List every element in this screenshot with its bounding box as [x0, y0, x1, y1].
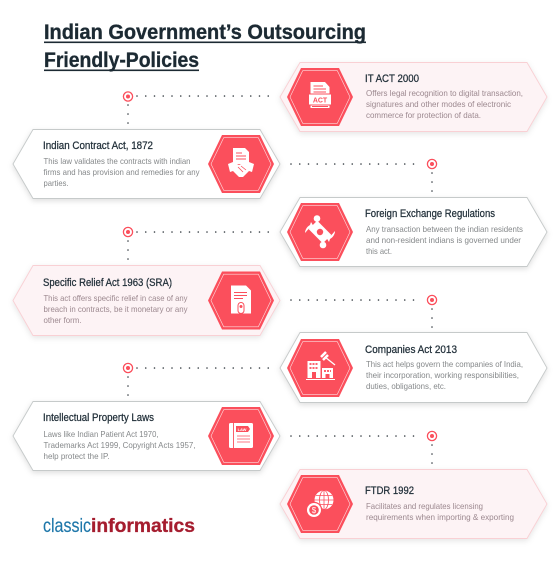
panel: Intellectual Property Laws: Trademarks Act 1999, Copyright Acts 1957, — [44, 441, 196, 450]
panel: Indian Contract Act, 1872: This law validates the contracts with indian — [44, 157, 191, 166]
connector: Contract Act to Foreign Exchange — [291, 159, 437, 192]
icon: contract handshake — [208, 135, 274, 193]
panel: Companies Act 2013: Companies Act 2013 — [365, 344, 457, 356]
panel: Specific Relief Act 1963 (SRA): This act offers specific relief in case of any — [44, 294, 188, 303]
panel: FTDR 1992: requirements when importing & exporting — [366, 513, 514, 522]
panel: IT Act 2000: Offers legal recognition to digital transaction, — [366, 89, 523, 98]
icon: document with seal — [208, 272, 274, 330]
icon: currency exchange — [287, 203, 353, 261]
panel: IT Act 2000 — [280, 62, 547, 132]
panel: IT Act 2000: commerce for protection of data. — [366, 111, 481, 120]
panel: Companies Act 2013: duties, obligations, etc. — [366, 382, 446, 391]
icon: act document: ACT — [313, 98, 328, 104]
panel: Indian Contract Act, 1872 — [13, 130, 280, 198]
panel: Specific Relief Act 1963 (SRA): Specific Relief Act 1963 (SRA) — [43, 277, 172, 289]
panel: FTDR 1992: FTDR 1992 — [365, 485, 414, 497]
panel: Specific Relief Act 1963 (SRA): other form. — [44, 316, 82, 325]
panel: Companies Act 2013: This act helps govern the companies of India, — [366, 360, 523, 369]
panel: Indian Contract Act, 1872: parties. — [44, 179, 68, 188]
panel: Companies Act 2013 — [280, 332, 547, 402]
panel: Foreign Exchange Regulations — [280, 198, 547, 266]
panel: FTDR 1992 — [280, 470, 547, 538]
panel: Intellectual Property Laws: help protect the IP. — [44, 452, 110, 461]
logo: classic informatics: classic — [43, 515, 91, 537]
panel: IT Act 2000: signatures and other modes of electronic — [366, 100, 511, 109]
icon: globe and coin: $ — [312, 506, 317, 515]
panel: Foreign Exchange Regulations: Any transaction between the indian residents — [366, 225, 523, 234]
panel: Indian Contract Act, 1872: firms and has provision and remedies for any — [44, 168, 200, 177]
panel: Companies Act 2013: their incorporation, working responsibilities, — [366, 371, 519, 380]
panel: Foreign Exchange Regulations: Foreign Exchange Regulations — [365, 208, 495, 220]
title: Friendly-Policies — [44, 48, 199, 72]
icon: law book — [208, 407, 274, 465]
connector: IT Act to Contract Act — [123, 92, 272, 124]
panel: Intellectual Property Laws — [13, 402, 280, 470]
panel: IT Act 2000: IT ACT 2000 — [365, 73, 419, 85]
panel: Indian Contract Act, 1872: Indian Contract Act, 1872 — [43, 140, 153, 152]
connector: Foreign Exchange to Specific Relief — [123, 227, 272, 260]
panel: FTDR 1992: Facilitates and regulates licensing — [366, 502, 483, 511]
title — [44, 20, 366, 72]
icon: globe and coin — [287, 475, 353, 533]
panel: Foreign Exchange Regulations: and non-resident indians is governed under — [366, 236, 521, 245]
logo: classic informatics: informatics — [91, 515, 195, 537]
connector: Companies Act to IP Laws — [123, 363, 272, 396]
icon: law book: LAW — [238, 427, 247, 432]
panel: Foreign Exchange Regulations: this act. — [366, 247, 392, 256]
panel: Intellectual Property Laws: Laws like Indian Patient Act 1970, — [44, 430, 158, 439]
icon: act document — [287, 68, 353, 126]
panel: Intellectual Property Laws: Intellectual Property Laws — [43, 412, 154, 424]
panel: Specific Relief Act 1963 (SRA) — [13, 266, 280, 336]
connector: IP Laws to FTDR — [291, 431, 437, 464]
connector: Specific Relief to Companies Act — [291, 295, 437, 328]
logo: classic informatics — [43, 515, 195, 537]
icon: buildings and gavel — [287, 339, 353, 397]
title: Indian Government’s Outsourcing — [44, 20, 366, 44]
panel: Specific Relief Act 1963 (SRA): breach in contracts, be it monetary or any — [44, 305, 188, 314]
